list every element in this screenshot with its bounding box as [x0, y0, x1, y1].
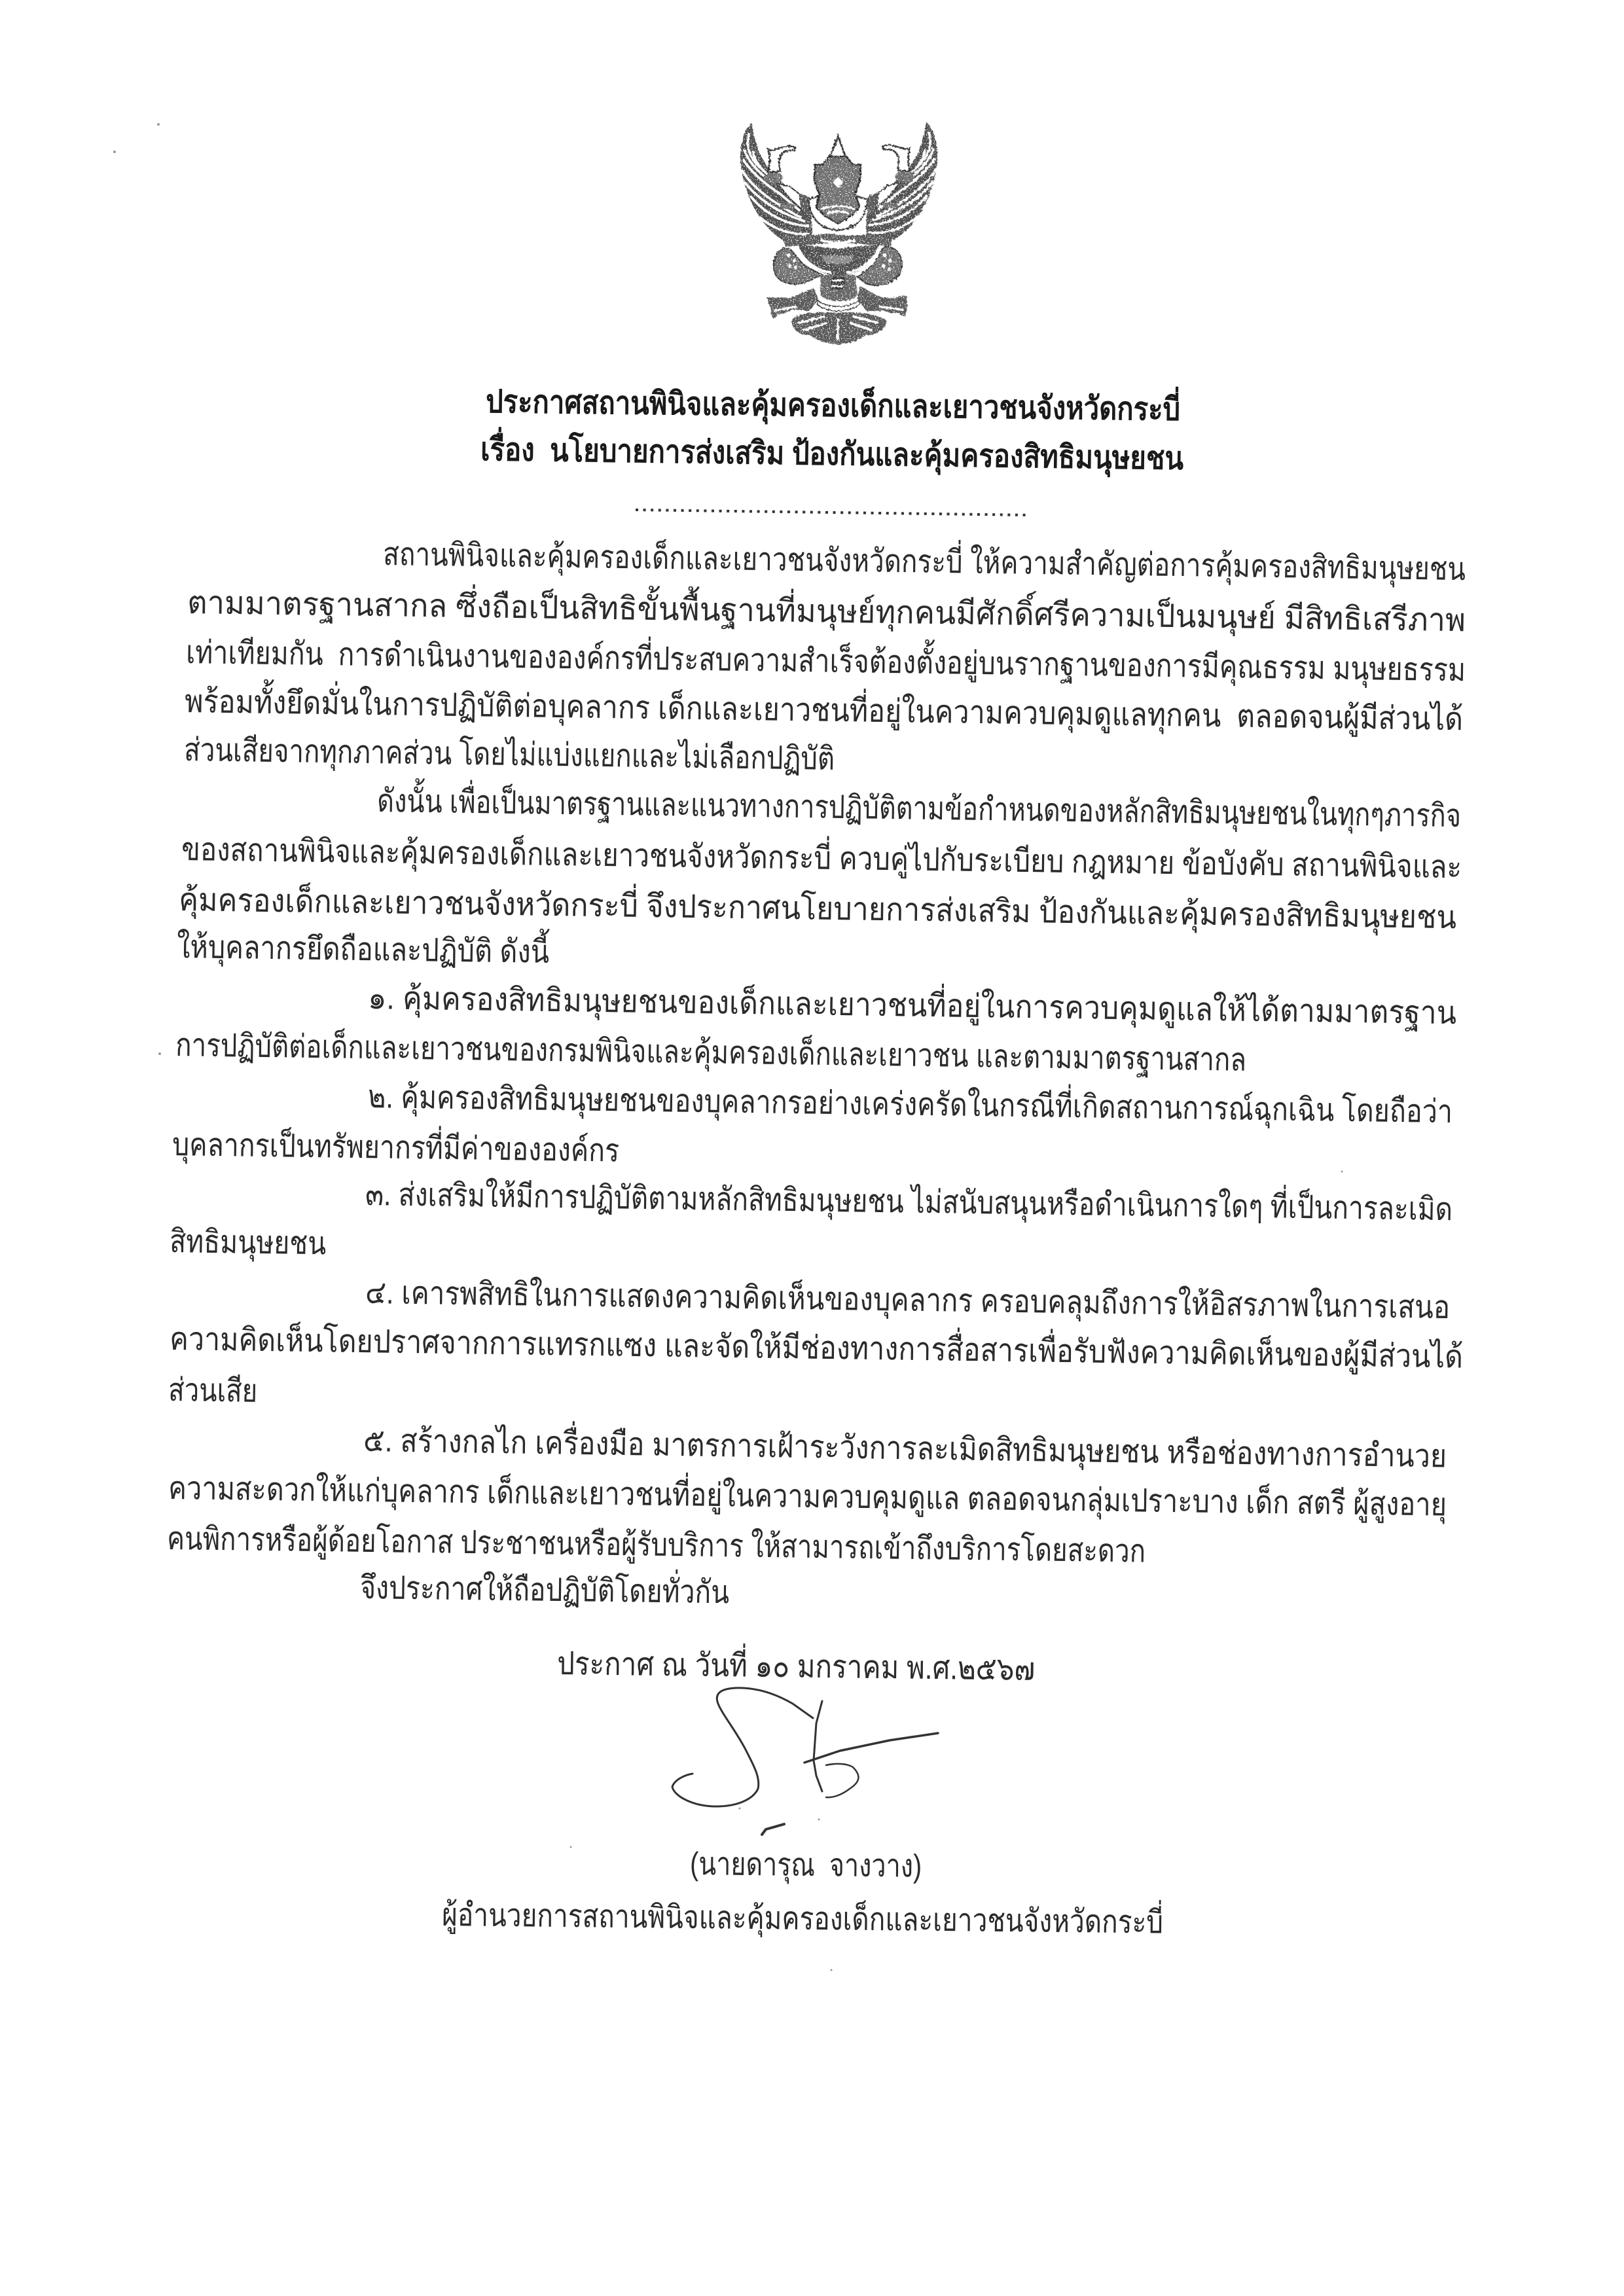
item 4: ส่วนเสีย	[168, 1372, 258, 1409]
signature	[672, 1688, 938, 1835]
right leg	[857, 286, 907, 316]
head: crown spire	[830, 135, 846, 156]
crescent	[817, 300, 859, 311]
dotted divider	[636, 510, 1029, 515]
item 5	[167, 1418, 1447, 1571]
item 4: ๔. เคารพสิทธิในการแสดงความคิดเห็นของบุคลากร ครอบคลุมถึงการให้อิสรภาพในการเสนอ	[365, 1273, 1450, 1327]
closing line: จึงประกาศให้ถือปฏิบัติโดยทั่วกัน	[360, 1565, 730, 1610]
item 5: ๕. สร้างกลไก เครื่องมือ มาตรการเฝ้าระวังการละเมิดสิทธิมนุษยชน หรือช่องทางการอำนวย	[363, 1418, 1447, 1476]
paragraph: policy statement: คุ้มครองเด็กและเยาวชนจังหวัดกระบี่ จึงประกาศนโยบายการส่งเสริม ป้องกันและคุ้มครองสิทธิมนุษยชน	[179, 877, 1457, 937]
paragraph: introduction: ส่วนเสียจากทุกภาคส่วน โดยไม่แบ่งแยกและไม่เลือกปฏิบัติ	[184, 731, 835, 778]
item 2: บุคลากรเป็นทรัพยากรที่มีค่าขององค์กร	[172, 1122, 620, 1170]
chest	[808, 196, 867, 230]
title: ประกาศสถานพินิจและคุ้มครองเด็กและเยาวชนจังหวัดกระบี่	[486, 378, 1181, 429]
belly	[820, 275, 857, 301]
item 3: สิทธิมนุษยชน	[170, 1224, 327, 1263]
paragraph: introduction	[184, 531, 1466, 778]
item 1	[175, 975, 1457, 1079]
signatory name: (นายดารุณ จางวาง)	[690, 1846, 922, 1886]
item 4: ความคิดเห็นโดยปราศจากการแทรกแซง และจัดให้มีช่องทางการสื่อสารเพื่อรับฟังความคิดเห็นของผู้มีส่วนได้	[170, 1316, 1464, 1376]
snake right	[857, 247, 902, 285]
signatory position: ผู้อำนวยการสถานพินิจและคุ้มครองเด็กและเยาวชนจังหวัดกระบี่	[442, 1892, 1163, 1942]
date line: ประกาศ ณ วันที่ ๑๐ มกราคม พ.ศ.๒๕๖๗	[557, 1641, 1036, 1687]
title	[480, 378, 1184, 478]
left wing	[740, 123, 812, 243]
item 1: การปฏิบัติต่อเด็กและเยาวชนของกรมพินิจและคุ้มครองเด็กและเยาวชน และตามมาตรฐานสากล	[175, 1026, 1246, 1079]
item 2: ๒. คุ้มครองสิทธิมนุษยชนของบุคลากรอย่างเคร่งครัดในกรณีที่เกิดสถานการณ์ฉุกเฉิน โดยถือว่า	[368, 1074, 1453, 1131]
tail	[792, 312, 887, 345]
paragraph: policy statement	[177, 778, 1462, 971]
item 1: ๑. คุ้มครองสิทธิมนุษยชนของเด็กและเยาวชนที่อยู่ในการควบคุมดูแลให้ได้ตามมาตรฐาน	[368, 975, 1457, 1032]
emblem: Garuda	[740, 122, 937, 345]
left leg	[767, 288, 818, 319]
item 4	[168, 1273, 1464, 1409]
right wing	[866, 122, 937, 242]
item 2	[172, 1074, 1453, 1170]
snake left	[774, 249, 823, 284]
paragraph: introduction: พร้อมทั้งยึดมั่นในการปฏิบัติต่อบุคลากร เด็กและเยาวชนที่อยู่ในความควบคุมดูแลทุกคน ตลอดจนผู้มีส่วนได้	[185, 678, 1464, 738]
paragraph: introduction: ตามมาตรฐานสากล ซึ่งถือเป็นสิทธิขั้นพื้นฐานที่มนุษย์ทุกคนมีศักดิ์ศรีความเป็นมนุษย์ มีสิทธิเสรีภาพ	[187, 579, 1466, 639]
item 5: คนพิการหรือผู้ด้อยโอกาส ประชาชนหรือผู้รับบริการ ให้สามารถเข้าถึงบริการโดยสะดวก	[167, 1520, 1146, 1571]
title: เรื่อง นโยบายการส่งเสริม ป้องกันและคุ้มครองสิทธิมนุษยชน	[480, 426, 1184, 478]
paragraph: policy statement: ให้บุคลากรยึดถือและปฏิบัติ ดังนี้	[177, 924, 550, 971]
body	[799, 244, 879, 276]
shoulder band	[781, 234, 892, 247]
scan specks	[113, 123, 1382, 1971]
item 3	[170, 1172, 1453, 1263]
head: crown and face	[814, 156, 861, 224]
